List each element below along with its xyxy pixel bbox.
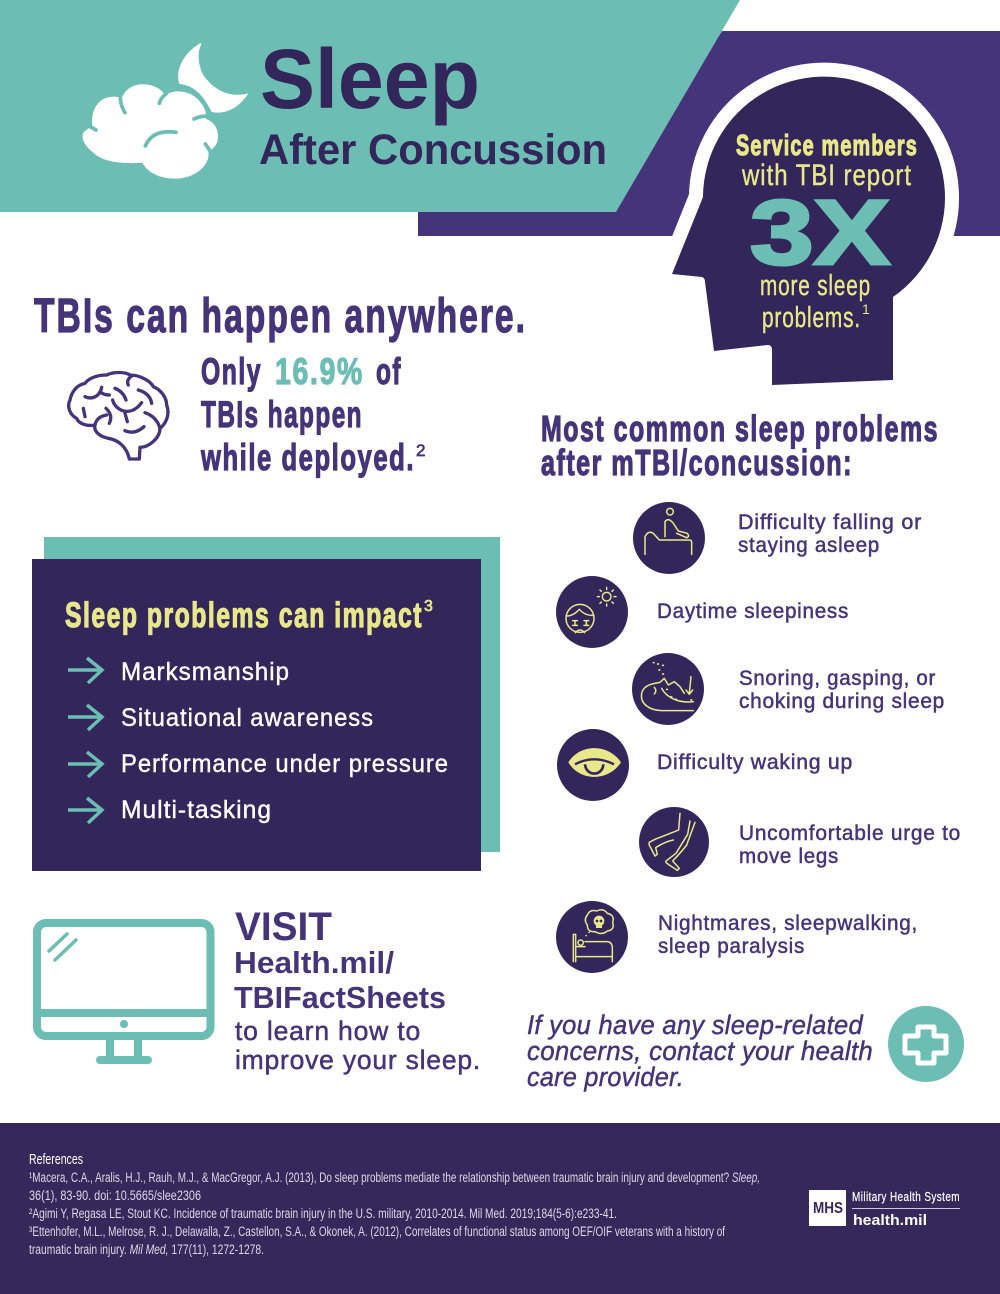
head callout: problems. <box>762 302 861 334</box>
footer band <box>0 1123 1000 1294</box>
logo: Military Health System: Military Health System <box>852 1189 960 1204</box>
text: daytime sleepiness: Daytime sleepiness <box>657 599 849 623</box>
icon: nightmares <box>556 901 628 973</box>
text: difficulty falling asleep <box>738 510 922 557</box>
panel heading: 3 <box>424 598 434 615</box>
callout: contact health care provider: care provider. <box>527 1062 684 1092</box>
text: difficulty waking up: Difficulty waking up <box>657 750 853 774</box>
icon: daytime sleepiness <box>556 576 628 648</box>
head callout <box>672 77 945 385</box>
references: 36(1), 83-90. doi: 10.5665/slee2306 <box>29 1188 201 1203</box>
head callout: 3X <box>750 182 890 284</box>
title: Sleep <box>260 32 480 126</box>
text: snoring <box>739 666 945 713</box>
logo: Military Health System: health.mil <box>853 1212 927 1229</box>
heading: TBIs can happen anywhere: TBIs can happen anywhere. <box>34 290 527 343</box>
icon: brain <box>69 372 168 459</box>
title: After Concussion <box>259 126 607 174</box>
text: urge to move legs: Uncomfortable urge to <box>739 821 961 845</box>
visit call to action: Health.mil/ <box>234 945 394 980</box>
visit call to action: TBIFactSheets <box>234 980 446 1015</box>
icon: medical cross <box>888 1006 964 1082</box>
visit call to action <box>234 905 481 1075</box>
impact list: Performance under pressure <box>121 750 449 778</box>
icon: restless legs <box>639 807 709 877</box>
text: urge to move legs: move legs <box>739 844 839 868</box>
text: nightmares: sleep paralysis <box>658 934 805 958</box>
purple header band <box>418 31 1000 236</box>
visit call to action: improve your sleep. <box>235 1045 481 1075</box>
deployed statistic: 16.9% <box>275 351 364 392</box>
callout: contact health care provider: concerns, contact your health <box>527 1036 873 1066</box>
teal header banner <box>0 0 740 212</box>
logo: Military Health System <box>809 1189 960 1229</box>
impact list: Situational awareness <box>121 704 374 732</box>
impact list: Multi-tasking <box>121 796 272 824</box>
heading: most common sleep problems <box>541 408 939 483</box>
visit call to action: to learn how to <box>235 1016 421 1046</box>
deployed statistic: while deployed. <box>200 437 415 478</box>
text: snoring: Snoring, gasping, or <box>739 666 936 690</box>
head callout: with TBI report <box>741 159 912 192</box>
references: References <box>29 1151 83 1168</box>
visit call to action: VISIT <box>235 905 332 949</box>
text: difficulty falling asleep: Difficulty falling or <box>738 510 922 534</box>
heading: most common sleep problems: after mTBI/concussion: <box>541 442 853 483</box>
deployed statistic: Only <box>201 351 262 392</box>
text: difficulty falling asleep: staying asleep <box>738 533 880 557</box>
head callout: Service members <box>736 130 918 162</box>
references: ³Ettenhofer, M.L., Melrose, R. J., Delawalla, Z., Castellon, S.A., & Okonek, A. (2012), Correlates of functional status among OEF/OIF veterans with a history of <box>29 1224 725 1239</box>
impact list: Marksmanship <box>121 658 290 686</box>
references: ¹Macera, C.A., Aralis, H.J., Rauh, M.J., & MacGregor, A.J. (2013), Do sleep problems mediate the relationship between traumatic brain injury and development? Sleep, <box>29 1170 760 1185</box>
deployed statistic <box>200 351 426 478</box>
callout: contact health care provider: If you have any sleep-related <box>527 1010 864 1040</box>
head callout: more sleep <box>760 270 871 302</box>
icon: snoring <box>632 653 704 725</box>
icon: eye <box>557 729 629 801</box>
icon: difficulty falling asleep <box>633 502 705 574</box>
text: nightmares <box>658 911 918 958</box>
icon: computer monitor <box>37 923 211 1064</box>
head callout: 1 <box>862 301 870 317</box>
panel: sleep problems impact <box>32 537 500 871</box>
references <box>29 1151 760 1257</box>
arrows <box>68 658 102 823</box>
logo: Military Health System: MHS <box>813 1200 843 1217</box>
text: urge to move legs <box>739 821 961 868</box>
title <box>259 32 607 174</box>
deployed statistic: TBIs happen <box>201 394 363 435</box>
deployed statistic: 2 <box>416 441 426 460</box>
references: traumatic brain injury. Mil Med, 177(11), 1272-1278. <box>29 1242 264 1257</box>
text: snoring: choking during sleep <box>739 689 945 713</box>
panel heading: Sleep problems can impact <box>65 596 423 635</box>
references: ²Agimi Y, Regasa LE, Stout KC. Incidence of traumatic brain injury in the U.S. military, 2010-2014. Mil Med. 2019;184(5-6):e233-41. <box>29 1206 617 1221</box>
deployed statistic: of <box>376 351 402 392</box>
callout: contact health care provider <box>527 1010 873 1092</box>
impact list <box>121 658 449 824</box>
text: nightmares: Nightmares, sleepwalking, <box>658 911 918 935</box>
icon: brain cloud and moon <box>83 43 248 179</box>
